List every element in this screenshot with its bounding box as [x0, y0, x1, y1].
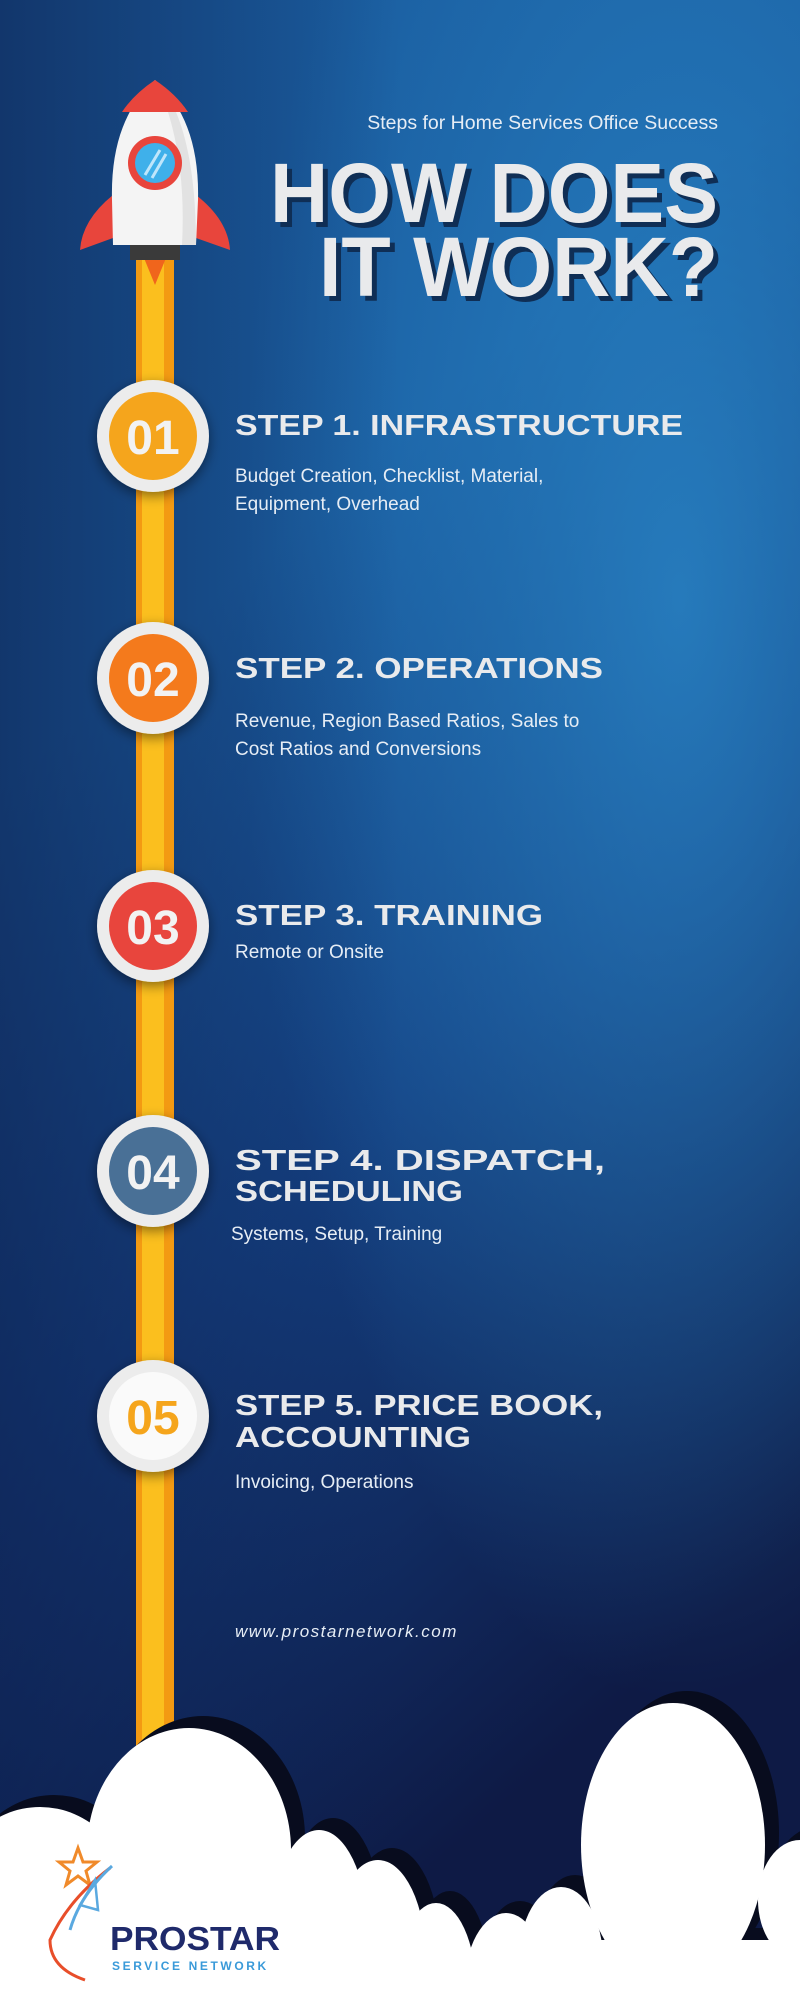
rocket exhaust pole — [136, 258, 174, 1758]
step 2 — [97, 622, 603, 760]
logo: prostar service network: PROSTAR — [110, 1920, 280, 1957]
step 3 — [97, 870, 543, 982]
subtitle: Steps for Home Services Office Success — [367, 112, 718, 134]
heading 1: STEP 1. INFRASTRUCTURE — [235, 410, 683, 442]
heading 5: STEP 5. PRICE BOOK, — [235, 1390, 603, 1422]
badge 01 — [97, 380, 209, 492]
badge 02 — [97, 622, 209, 734]
logo: prostar service network: SERVICE NETWORK — [112, 1959, 269, 1973]
description 2: Cost Ratios and Conversions — [235, 739, 481, 760]
website url: www.prostarnetwork.com — [235, 1622, 458, 1641]
heading 4: SCHEDULING — [235, 1176, 463, 1208]
step 1 — [97, 380, 683, 515]
description 3: Remote or Onsite — [235, 942, 384, 963]
heading 2: STEP 2. OPERATIONS — [235, 653, 603, 685]
badge 03 — [97, 870, 209, 982]
logo: prostar service network — [50, 1848, 280, 1980]
icon: rocket — [80, 80, 230, 260]
badge 05 — [97, 1360, 209, 1472]
heading 3: STEP 3. TRAINING — [235, 900, 543, 932]
heading 4: STEP 4. DISPATCH, — [235, 1145, 605, 1177]
badge 03: 03 — [126, 902, 180, 955]
title — [270, 146, 723, 319]
description 5: Invoicing, Operations — [235, 1472, 414, 1493]
title: HOW DOES — [275, 151, 723, 245]
heading 5: ACCOUNTING — [235, 1422, 471, 1454]
badge 05: 05 — [126, 1392, 180, 1445]
badge 01: 01 — [126, 412, 180, 465]
step 5 — [97, 1360, 603, 1493]
description 2: Revenue, Region Based Ratios, Sales to — [235, 711, 579, 732]
badge 04 — [97, 1115, 209, 1227]
title: HOW DOES — [270, 146, 718, 240]
badge 04: 04 — [126, 1147, 180, 1200]
description 4: Systems, Setup, Training — [231, 1224, 442, 1245]
description 1: Budget Creation, Checklist, Material, — [235, 466, 543, 487]
clouds — [0, 1691, 800, 2000]
badge 02: 02 — [126, 654, 180, 707]
title: IT WORK? — [324, 225, 723, 319]
icon: star swoosh — [50, 1848, 112, 1980]
description 1: Equipment, Overhead — [235, 494, 420, 515]
title: IT WORK? — [319, 220, 718, 314]
step 4 — [97, 1115, 605, 1245]
